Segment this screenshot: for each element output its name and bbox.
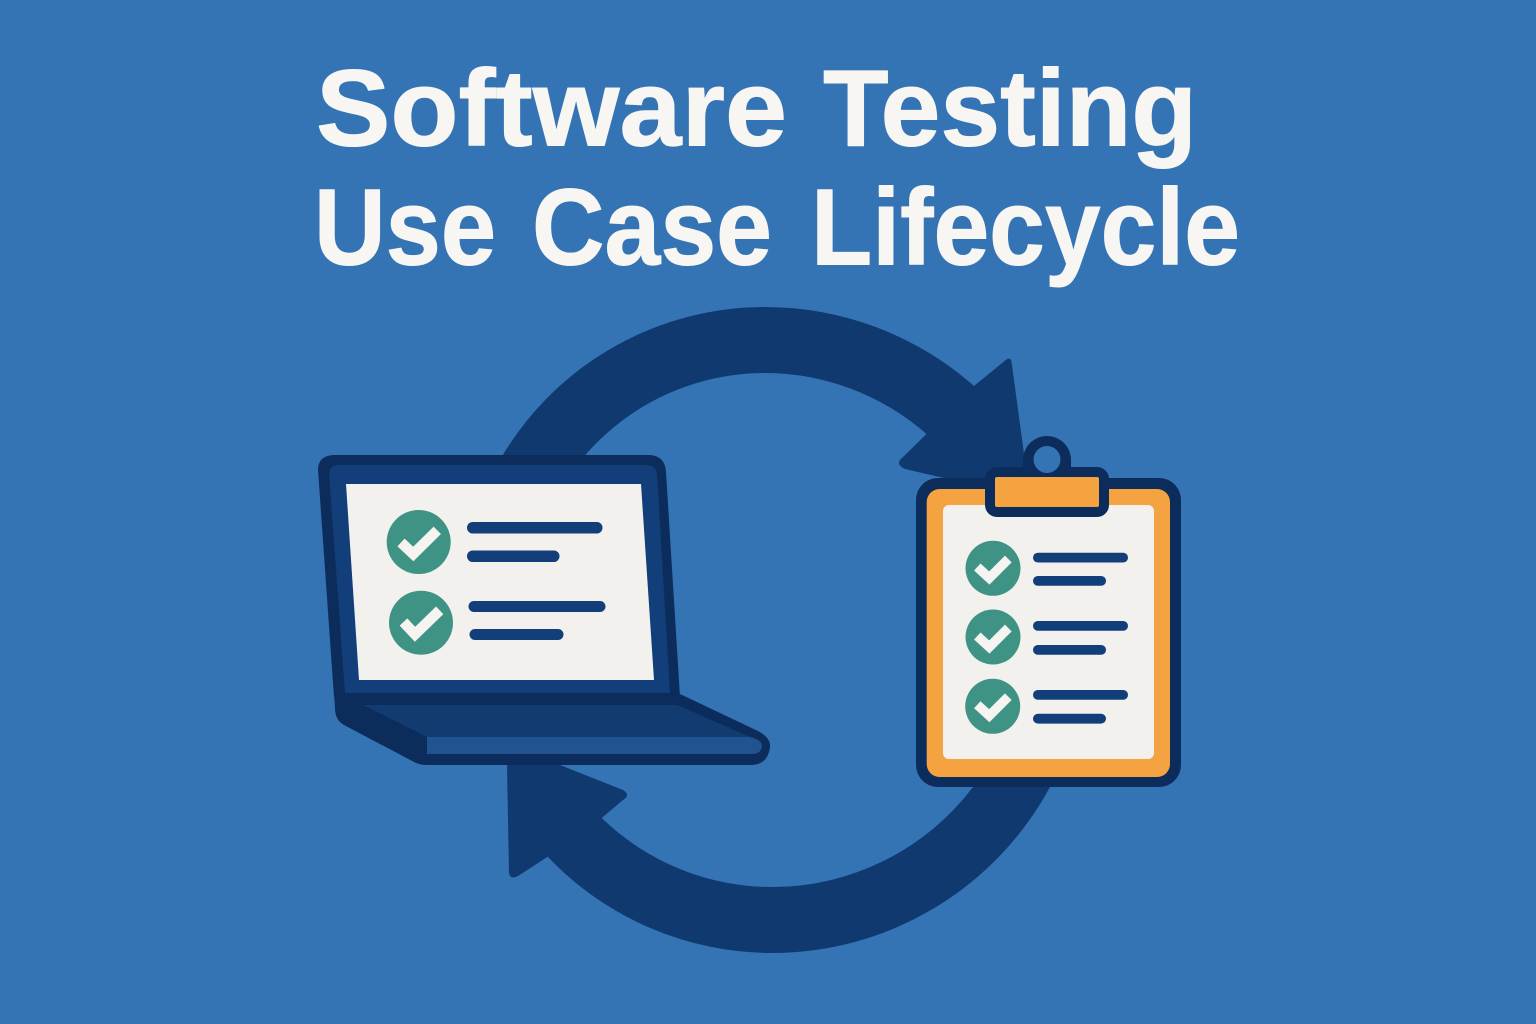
title: Testing — [823, 48, 1197, 170]
laptop base — [334, 694, 770, 765]
title: Use — [314, 166, 496, 288]
laptop screen — [346, 484, 654, 680]
laptop check row 2 — [389, 591, 606, 655]
arrow: top cycle arc to clipboard — [495, 307, 1030, 498]
icon: clipboard — [916, 436, 1181, 787]
title: Case — [532, 166, 772, 288]
icon: laptop — [318, 455, 770, 765]
clipboard body — [916, 478, 1181, 787]
laptop screen frame — [318, 455, 680, 697]
clipboard check row 1 — [966, 541, 1128, 596]
clipboard paper — [943, 505, 1154, 759]
clipboard clip and ring — [985, 436, 1109, 517]
laptop check row 1 — [387, 510, 602, 574]
arrow: bottom cycle arc to laptop — [507, 750, 1060, 953]
title: Lifecycle — [811, 166, 1240, 288]
clipboard check row 2 — [966, 610, 1128, 664]
title: Software — [316, 48, 787, 170]
title — [314, 48, 1240, 288]
clipboard check row 3 — [965, 679, 1128, 734]
